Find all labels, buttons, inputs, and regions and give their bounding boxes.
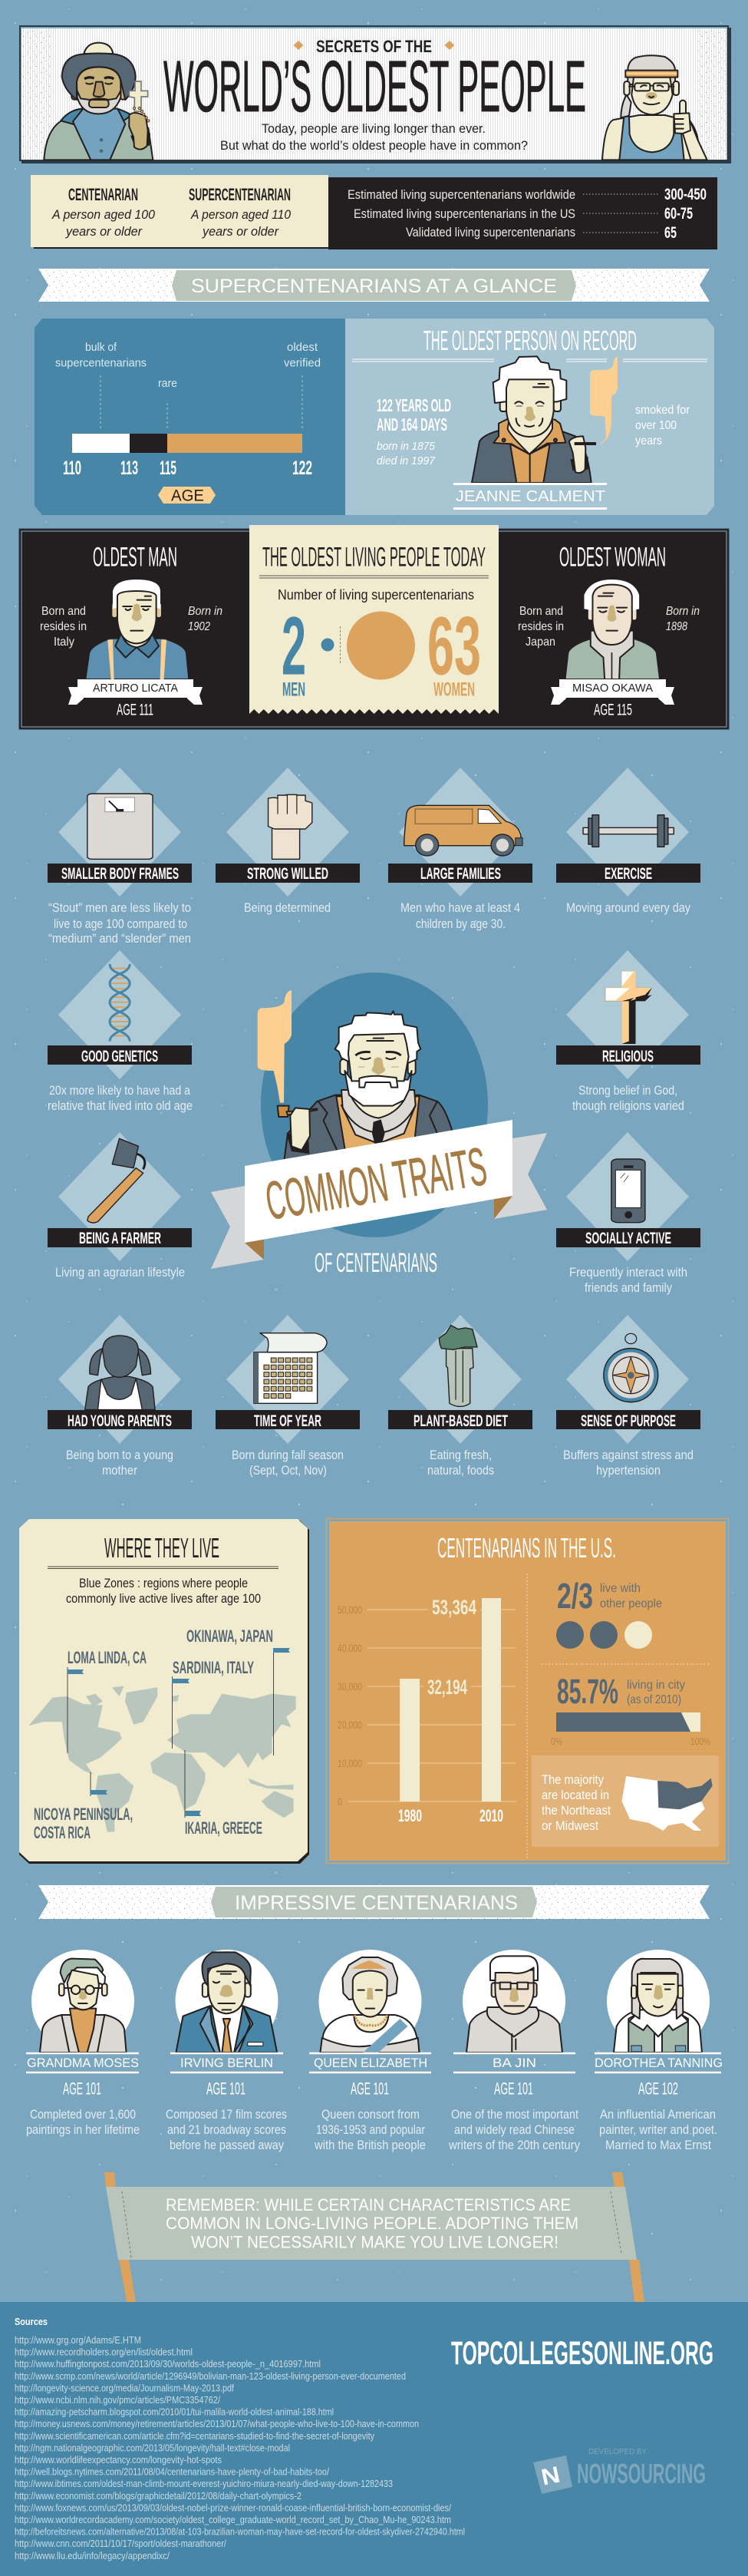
name ribbon: misao okawa xyxy=(551,679,674,705)
stat: living in city: 100% xyxy=(690,1735,710,1747)
trait: exercise xyxy=(556,768,700,915)
panel: age chart xyxy=(35,319,345,515)
description: 1936-1953 and popular xyxy=(316,2122,425,2137)
definition: supercentenarian: A person aged 110 xyxy=(190,207,291,222)
sources list: http://money.usnews.com/money/retirement/articles/2013/01/07/what-people-who-live-to-100-have-in-common xyxy=(15,2419,419,2429)
definition: centenarian: CENTENARIAN xyxy=(68,185,138,204)
banner sign: remember note: REMEMBER: WHILE CERTAIN CHARACTERISTICS ARE xyxy=(166,2195,571,2214)
age text xyxy=(377,395,451,467)
trait: large families: children by age 30. xyxy=(416,916,506,931)
flag: nicoya xyxy=(34,1772,133,1842)
trait: had young parents: HAD YOUNG PARENTS xyxy=(68,1412,172,1430)
logo: nowsourcing xyxy=(533,2455,706,2494)
sources list: http://www.scmp.com/news/world/article/1296949/bolivian-man-123-oldest-living-person-ever-documented xyxy=(15,2371,406,2382)
intro text: Blue Zones : regions where people xyxy=(79,1576,248,1590)
bar chart: us centenarians: 10,000 xyxy=(338,1757,362,1769)
trait: sense of purpose: Buffers against stress and xyxy=(563,1448,694,1462)
panel: centenarians in the us xyxy=(327,1518,729,1864)
axis label: age: AGE xyxy=(171,487,204,505)
stats list: 60-75 xyxy=(664,205,693,223)
description: writers of the 20th century xyxy=(448,2138,580,2152)
sources list: http://www.recordholders.org/en/list/oldest.html xyxy=(15,2347,193,2358)
trait: sense of purpose: hypertension xyxy=(596,1463,661,1478)
age: misao: AGE 115 xyxy=(594,702,632,718)
definition: centenarian: years or older xyxy=(65,224,143,239)
banner: supercentenarians at a glance: SUPERCENTENARIANS AT A GLANCE xyxy=(191,276,557,297)
oldest man details: 1902 xyxy=(188,620,210,633)
trait: large families xyxy=(388,768,532,931)
axis numbers: 122 xyxy=(292,457,312,479)
oldest man details: Born and xyxy=(41,605,86,618)
trait: religious: RELIGIOUS xyxy=(602,1048,654,1065)
infographic canvas: THE OLDEST LIVING PEOPLE TODAY xyxy=(262,542,486,573)
credit: developed by: DEVELOPED BY xyxy=(588,2447,647,2456)
flag: ikaria: IKARIA, GREECE xyxy=(185,1818,262,1838)
subtitle: Today, people are living longer than ever. xyxy=(262,121,486,136)
subtitle: But what do the world’s oldest people have in common? xyxy=(220,138,528,153)
panel: ba jin xyxy=(448,1950,580,2152)
description: paintings in her lifetime xyxy=(26,2122,140,2137)
panel: definitions xyxy=(31,175,717,249)
age text: died in 1997 xyxy=(377,454,436,467)
panel: queen elizabeth xyxy=(309,1950,431,2152)
icon: fist xyxy=(269,794,312,859)
panel: header xyxy=(19,25,731,163)
smoking text: years xyxy=(635,434,662,447)
icon: old man with cross xyxy=(44,43,153,160)
oldest man details: Italy xyxy=(54,636,74,649)
icon: diamond right xyxy=(445,41,454,50)
trait: plant-based diet: PLANT-BASED DIET xyxy=(414,1412,508,1430)
ribbon: common traits xyxy=(211,1120,547,1269)
bar chart: us centenarians: 50,000 xyxy=(338,1603,362,1616)
stat: two thirds: 2/3 xyxy=(557,1576,593,1616)
panel: where they live xyxy=(19,1519,309,1864)
stats list: Estimated living supercentenarians in the US xyxy=(354,206,575,221)
trait: good genetics: 20x more likely to have had a xyxy=(49,1083,190,1098)
sources list: http://ngm.nationalgeographic.com/2013/05/longevity/hall-text#close-modal xyxy=(15,2442,290,2453)
trait: good genetics: relative that lived into old age xyxy=(48,1098,193,1113)
icon: van xyxy=(404,805,522,856)
name ribbon: arturo licata: ARTURO LICATA xyxy=(93,682,178,695)
description: and 21 broadway scores xyxy=(167,2122,286,2137)
stats list: Validated living supercentenarians xyxy=(406,225,575,239)
trait: sense of purpose xyxy=(556,1315,700,1478)
bar chart: us centenarians: 53,364 xyxy=(432,1596,476,1619)
trait: strong willed: Being determined xyxy=(244,900,331,915)
bar chart: us centenarians: 0 xyxy=(338,1795,342,1808)
description: with the British people xyxy=(314,2138,426,2152)
age: AGE 101 xyxy=(206,2079,245,2099)
banner sign: remember note: WON’T NECESSARILY MAKE YOU LIVE LONGER! xyxy=(191,2232,559,2252)
trait: large families: Men who have at least 4 xyxy=(400,900,520,915)
stat: two thirds: live with xyxy=(600,1582,641,1595)
icon: old man with pipe xyxy=(258,990,455,1167)
trait: good genetics xyxy=(48,950,193,1113)
trait: religious: though religions varied xyxy=(572,1098,684,1113)
sources list: http://www.worldrecordacademy.com/society/oldest_college_graduate-world_record_set_by_Chao_Mu-he_90243.htm xyxy=(15,2515,451,2525)
icon: phone xyxy=(611,1159,645,1223)
stat: living in city: living in city xyxy=(627,1679,685,1692)
icon: irving berlin portrait xyxy=(176,1952,277,2053)
stats list: 65 xyxy=(664,224,677,242)
name label: jeanne calment xyxy=(453,483,607,510)
oldest man details: resides in xyxy=(40,620,87,633)
oldest woman details xyxy=(518,605,700,649)
definition: centenarian xyxy=(51,185,156,239)
trait: being a farmer xyxy=(48,1132,192,1280)
trait: strong willed xyxy=(216,768,360,915)
oldest man details: Born in xyxy=(188,605,222,618)
trait: plant-based diet xyxy=(388,1315,532,1478)
callout: majority location: or Midwest xyxy=(542,1818,598,1833)
flag: ikaria xyxy=(185,1750,262,1838)
trait: strong willed: STRONG WILLED xyxy=(247,865,328,883)
panel: oldest living people today receipt xyxy=(249,525,499,714)
sources list: http://www.scientificamerican.com/article.cfm?id=centarians-studied-to-find-the-secret-of-longevity xyxy=(15,2431,375,2442)
trait: sense of purpose: SENSE OF PURPOSE xyxy=(581,1412,676,1430)
stat: two thirds: other people xyxy=(600,1597,662,1610)
axis numbers: 115 xyxy=(160,457,176,479)
trait: socially active: Frequently interact with xyxy=(569,1265,687,1280)
sources list: http://www.cnn.com/2011/10/17/sport/oldest-marathoner/ xyxy=(15,2538,226,2549)
icon: barbell xyxy=(583,815,674,847)
description xyxy=(314,2107,426,2152)
sources list xyxy=(15,2335,465,2561)
stat: two thirds xyxy=(556,1576,662,1649)
trait: smaller body frames: “Stout” men are less likely to xyxy=(48,900,191,915)
subtitle xyxy=(220,121,528,153)
description xyxy=(599,2107,717,2152)
trait: being a farmer: Living an agrarian lifestyle xyxy=(55,1265,185,1280)
central feature: common traits: OF CENTENARIANS xyxy=(315,1248,437,1278)
definition: centenarian: A person aged 100 xyxy=(51,207,156,222)
panel: oldest people today: OLDEST MAN xyxy=(93,542,177,573)
flag: sardinia: SARDINIA, ITALY xyxy=(173,1658,254,1677)
banner sign: remember note xyxy=(104,2172,644,2302)
name ribbon: arturo licata xyxy=(68,679,203,705)
chart labels: rare xyxy=(158,377,177,390)
smoking text xyxy=(635,404,690,447)
axis numbers: 110 xyxy=(63,457,81,479)
icon: ba jin portrait xyxy=(466,1956,562,2053)
sources list: http://www.foxnews.com/us/2013/09/03/oldest-nobel-prize-winner-ronald-coase-influential-british-born-economist-dies/ xyxy=(15,2502,451,2513)
chart labels: bulk of xyxy=(85,341,117,354)
age text: AND 164 DAYS xyxy=(377,414,447,434)
stat: women xyxy=(347,599,481,700)
stat: living in city: 85.7% xyxy=(557,1672,618,1711)
definition: supercentenarian: years or older xyxy=(202,224,279,239)
panel: irving berlin xyxy=(166,1950,287,2152)
chart labels: supercentenarians xyxy=(55,356,147,370)
sources list: http://www.huffingtonpost.com/2013/09/30/worlds-oldest-people-_n_4016997.html xyxy=(15,2359,321,2370)
stat: men: 2 xyxy=(282,599,306,692)
trait: plant-based diet: natural, foods xyxy=(427,1463,494,1478)
oldest woman details: Born in xyxy=(666,605,700,618)
bar chart: us centenarians: 40,000 xyxy=(338,1642,362,1654)
axis numbers: 113 xyxy=(120,457,138,479)
icon: dna xyxy=(110,964,130,1042)
sources list: http://www.grg.org/Adams/E.HTM xyxy=(15,2335,141,2346)
stat: living in city xyxy=(551,1672,710,1747)
icon: diamond left xyxy=(293,41,304,50)
name: ba jin: BA JIN xyxy=(493,2056,536,2070)
oldest woman details: Japan xyxy=(526,636,555,649)
ribbon: common traits: COMMON TRAITS xyxy=(262,1136,491,1231)
stats list: 300-450 xyxy=(664,186,707,203)
name: grandma moses: GRANDMA MOSES xyxy=(27,2056,139,2070)
banner: impressive centenarians: IMPRESSIVE CENTENARIANS xyxy=(235,1891,518,1914)
description xyxy=(26,2107,140,2137)
panel: oldest people today xyxy=(19,529,729,729)
trait: good genetics: GOOD GENETICS xyxy=(81,1048,158,1065)
flag: nicoya: COSTA RICA xyxy=(34,1823,91,1842)
subheading: Number of living supercentenarians xyxy=(278,587,474,603)
icon: young mother xyxy=(85,1336,155,1410)
stat: women: 63 xyxy=(427,599,481,692)
flag: loma linda xyxy=(68,1648,147,1753)
trait: smaller body frames: “medium” and “slender” men xyxy=(48,931,191,946)
us map xyxy=(621,1776,713,1831)
axis label: age xyxy=(158,487,216,505)
age: AGE 102 xyxy=(638,2079,678,2099)
intro text xyxy=(66,1576,261,1606)
trait: religious: Strong belief in God, xyxy=(578,1083,677,1098)
description: and widely read Chinese xyxy=(454,2122,575,2137)
trait: exercise: Moving around every day xyxy=(566,900,690,915)
icon: calendar xyxy=(254,1333,327,1403)
oldest woman details: resides in xyxy=(518,620,564,633)
trait: time of year: Born during fall season xyxy=(232,1448,344,1462)
age text: born in 1875 xyxy=(377,440,436,453)
trait: religious xyxy=(556,950,700,1113)
description: Completed over 1,600 xyxy=(30,2107,136,2122)
sources list: http://www.ibtimes.com/oldest-man-climb-mount-everest-yuichiro-miura-nearly-died-way-down-1282433 xyxy=(15,2479,393,2489)
age: arturo: AGE 111 xyxy=(117,702,153,718)
chart labels xyxy=(55,341,321,390)
trait: socially active: friends and family xyxy=(585,1280,672,1295)
bar chart: us centenarians: 20,000 xyxy=(338,1719,362,1731)
icon: scale xyxy=(87,794,153,859)
stats list: Estimated living supercentenarians worldwide xyxy=(348,187,575,202)
description xyxy=(448,2107,580,2152)
oldest woman details: Born and xyxy=(519,605,563,618)
bar chart: us centenarians: 1980 xyxy=(398,1806,422,1825)
trait: had young parents xyxy=(48,1315,192,1478)
heading: secrets of the: SECRETS OF THE xyxy=(316,37,432,56)
description: Composed 17 film scores xyxy=(166,2107,287,2122)
trait: smaller body frames: SMALLER BODY FRAMES xyxy=(61,865,179,883)
trait: plant-based diet: Eating fresh, xyxy=(430,1448,492,1462)
definition: supercentenarian xyxy=(189,185,291,239)
icon: celery xyxy=(439,1326,477,1406)
banner: supercentenarians at a glance xyxy=(38,269,710,302)
flag: okinawa xyxy=(186,1627,290,1755)
flag: nicoya: NICOYA PENINSULA, xyxy=(34,1805,133,1824)
icon: arturo licata portrait xyxy=(85,580,189,679)
stat: women: WOMEN xyxy=(433,679,475,700)
flag: okinawa: OKINAWA, JAPAN xyxy=(186,1627,273,1646)
description: painter, writer and poet. xyxy=(599,2122,717,2137)
trait: smaller body frames: live to age 100 compared to xyxy=(54,916,187,931)
bar chart: us centenarians: 30,000 xyxy=(338,1680,362,1693)
sources list: http://www.economist.com/blogs/graphicdetail/2012/08/daily-chart-olympics-2 xyxy=(15,2491,302,2502)
flag: sardinia xyxy=(172,1658,254,1749)
callout: majority location: the Northeast xyxy=(542,1803,611,1818)
sources heading: Sources xyxy=(15,2316,48,2327)
bar chart: us centenarians: 32,194 xyxy=(427,1676,467,1699)
trait: being a farmer: BEING A FARMER xyxy=(79,1230,161,1247)
name: irving berlin xyxy=(170,2053,283,2072)
description: An influential American xyxy=(600,2107,716,2122)
trait: time of year: (Sept, Oct, Nov) xyxy=(249,1463,327,1478)
flag: loma linda: LOMA LINDA, CA xyxy=(68,1648,147,1667)
name ribbon: misao okawa: MISAO OKAWA xyxy=(572,682,653,695)
stat: living in city: 0% xyxy=(551,1735,562,1747)
stat: men: MEN xyxy=(282,679,305,700)
name: queen elizabeth: QUEEN ELIZABETH xyxy=(314,2056,427,2070)
axis numbers xyxy=(63,457,312,479)
icon: dorothea tanning portrait xyxy=(614,1959,702,2053)
chart labels: verified xyxy=(284,356,321,370)
sources list: http://longevity-science.org/media/Journalism-May-2013.pdf xyxy=(15,2383,234,2393)
oldest woman details: 1898 xyxy=(666,620,687,633)
age: AGE 101 xyxy=(63,2079,101,2099)
name: dorothea tanning: DOROTHEA TANNING xyxy=(595,2056,723,2070)
description: Married to Max Ernst xyxy=(605,2138,711,2152)
age: AGE 101 xyxy=(351,2079,389,2099)
sources list: http://www.llu.edu/info/legacy/appendixc/ xyxy=(15,2551,170,2561)
trait: exercise: EXERCISE xyxy=(605,865,652,883)
icon: grandma moses portrait xyxy=(40,1959,127,2053)
central feature: common traits xyxy=(211,973,547,1278)
world map xyxy=(28,1686,296,1832)
icon: hoe xyxy=(87,1138,145,1223)
sources list: http://www.worldlifeexpectancy.com/longevity-hot-spots xyxy=(15,2455,222,2465)
icon: jeanne calment portrait xyxy=(472,356,618,483)
description: before he passed away xyxy=(170,2138,284,2152)
panel: footer xyxy=(0,2302,748,2576)
icon: cross xyxy=(605,971,652,1044)
banner: impressive centenarians xyxy=(38,1885,710,1919)
definition: supercentenarian: SUPERCENTENARIAN xyxy=(189,185,291,204)
trait: had young parents: mother xyxy=(102,1463,137,1478)
icon: old woman thumbs up xyxy=(602,55,707,160)
age text: 122 YEARS OLD xyxy=(377,395,451,415)
trait: time of year xyxy=(216,1315,360,1478)
panel: grandma moses xyxy=(26,1950,140,2137)
chart labels: oldest xyxy=(287,341,318,354)
panel: oldest person on record xyxy=(345,319,714,515)
age: AGE 101 xyxy=(494,2079,533,2099)
sources list: http://amazing-petscharm.blogspot.com/2010/01/tui-malila-world-oldest-animal-188.html xyxy=(15,2407,334,2418)
panel: dorothea tanning xyxy=(595,1950,723,2152)
panel: common traits grid xyxy=(48,768,700,1478)
sources list: http://well.blogs.nytimes.com/2011/08/04/centenarians-have-plenty-of-bad-habits-too/ xyxy=(15,2467,329,2478)
icon: compass xyxy=(604,1333,658,1402)
sources list: http://beforeitsnews.com/alternative/2013/08/at-103-brazilian-woman-may-have-set-record-for-oldest-skydiver-2742940.html xyxy=(15,2527,465,2538)
description: Queen consort from xyxy=(321,2107,420,2122)
name label: jeanne calment: JEANNE CALMENT xyxy=(456,488,605,505)
callout: majority location xyxy=(532,1755,719,1847)
stat: living in city: (as of 2010) xyxy=(627,1693,681,1706)
description: One of the most important xyxy=(451,2107,578,2122)
oldest man details xyxy=(40,605,222,649)
logo: nowsourcing: N xyxy=(539,2462,562,2491)
trait: time of year: TIME OF YEAR xyxy=(254,1412,321,1430)
sources list: http://www.ncbi.nlm.nih.gov/pmc/articles/PMC3354762/ xyxy=(15,2395,220,2406)
trait: socially active: SOCIALLY ACTIVE xyxy=(585,1230,671,1247)
intro text: commonly live active lives after age 100 xyxy=(66,1591,261,1606)
bar chart: age ranges xyxy=(72,434,302,453)
stats list xyxy=(348,186,707,242)
panel: where they live: WHERE THEY LIVE xyxy=(104,1532,219,1564)
name: irving berlin: IRVING BERLIN xyxy=(180,2056,273,2070)
description xyxy=(166,2107,287,2152)
icon: queen elizabeth portrait xyxy=(320,1957,419,2053)
name: queen elizabeth xyxy=(309,2053,431,2072)
trait: socially active xyxy=(556,1132,700,1295)
icon: misao okawa portrait xyxy=(565,580,660,679)
callout: majority location: are located in xyxy=(542,1788,609,1802)
bar chart: us centenarians xyxy=(338,1596,516,1825)
trait: smaller body frames xyxy=(48,768,192,946)
smoking text: over 100 xyxy=(635,419,677,432)
trait: large families: LARGE FAMILIES xyxy=(420,865,501,883)
bar chart: us centenarians: 2010 xyxy=(479,1806,503,1825)
name: ba jin xyxy=(453,2053,575,2072)
callout: majority location: The majority xyxy=(542,1772,604,1787)
banner sign: remember note: COMMON IN LONG-LIVING PEOPLE. ADOPTING THEM xyxy=(166,2214,578,2233)
trait: had young parents: Being born to a young xyxy=(66,1448,173,1462)
smoking text: smoked for xyxy=(635,404,690,417)
